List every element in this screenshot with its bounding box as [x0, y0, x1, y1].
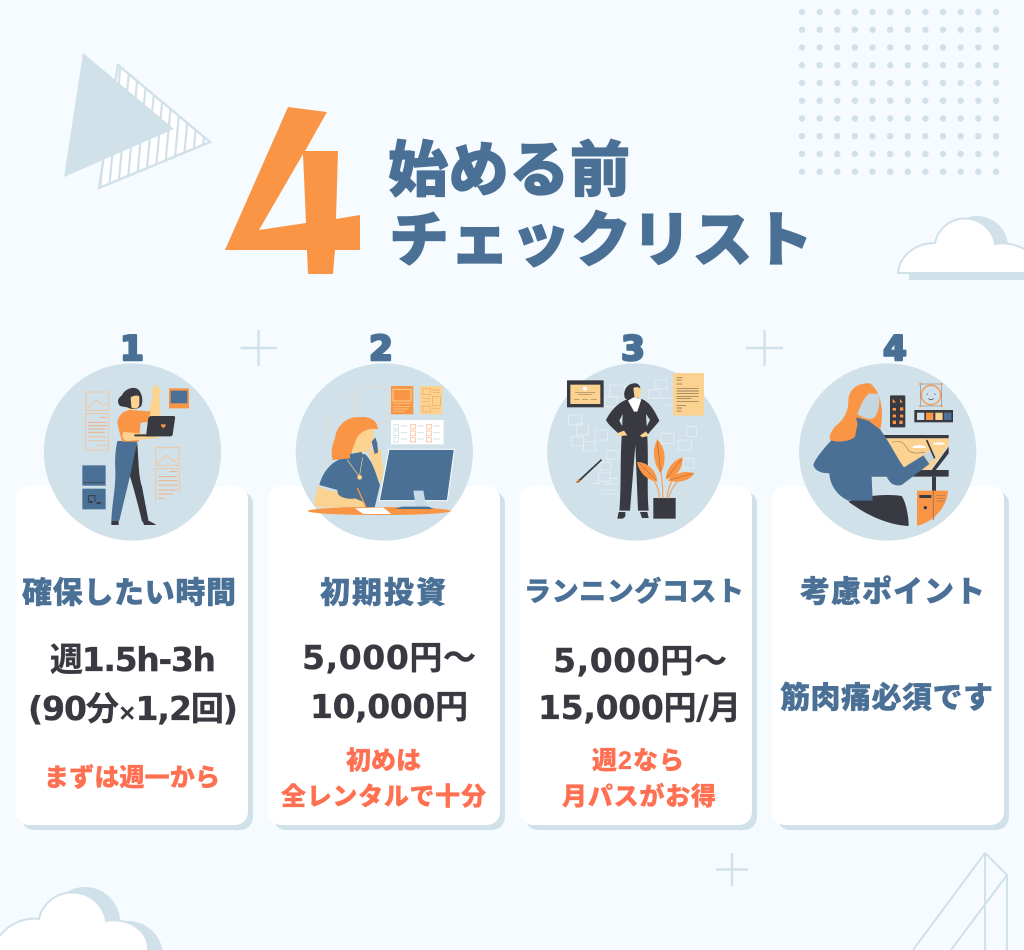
- card 4 text: [780, 575, 993, 715]
- card 1 text: まずは週一から: [44, 763, 220, 792]
- card 3 text: 5,000円～: [553, 641, 727, 680]
- card 2 text: 初めは: [346, 747, 421, 775]
- decoration: plus sign: [716, 853, 748, 886]
- illustration: woman with laptop: [44, 363, 221, 541]
- card 2 text: 10,000円: [310, 687, 468, 726]
- card 3 text: 15,000円/月: [538, 688, 741, 727]
- decoration: hatched triangle: [99, 60, 211, 190]
- decoration: top-right cloud: [898, 216, 1024, 280]
- card 3 text: 週2なら: [592, 747, 684, 775]
- card 2 text: [281, 577, 486, 811]
- card 3 text: [524, 576, 744, 811]
- decoration: solid triangle: [64, 53, 174, 177]
- decoration: plus sign: [240, 330, 277, 366]
- card 3 text: ランニングコスト: [524, 576, 744, 607]
- big number 4: [225, 107, 360, 274]
- number 2: 2: [369, 329, 393, 369]
- decoration: bottom-right line triangle: [913, 853, 1007, 950]
- panel: card 2: [268, 486, 505, 830]
- card 1 text: (90分×1,2回): [28, 689, 238, 728]
- card 2 text: 5,000円～: [302, 638, 476, 677]
- illustration: woman on phone at monitor: [296, 363, 473, 541]
- card 1 text: 週1.5h-3h: [50, 640, 216, 679]
- number 3: 3: [621, 329, 645, 369]
- title: 始める前: [388, 137, 630, 204]
- panel: card 1: [16, 486, 253, 830]
- card 4 text: 筋肉痛必須です: [780, 682, 993, 715]
- card 2 text: 全レンタルで十分: [281, 783, 486, 811]
- illustration: woman in suit with plant: [547, 363, 724, 541]
- panel: card 4: [772, 486, 1009, 830]
- illustration: woman drawing on tablet: [799, 363, 976, 541]
- card 1 text: [22, 577, 238, 792]
- card 4 text: 考慮ポイント: [800, 575, 985, 609]
- card 1 text: 確保したい時間: [22, 577, 236, 610]
- title: チェックリスト: [389, 207, 813, 274]
- panel: card 3: [520, 486, 757, 830]
- decoration: dot grid: [799, 9, 999, 175]
- card 2 text: 初期投資: [320, 577, 446, 610]
- title: [388, 137, 813, 274]
- number 4: 4: [883, 329, 907, 369]
- card 3 text: 月パスがお得: [562, 782, 716, 811]
- decoration: plus sign: [746, 330, 783, 366]
- number 1: 1: [120, 329, 144, 369]
- decoration: bottom-left cloud: [0, 887, 163, 950]
